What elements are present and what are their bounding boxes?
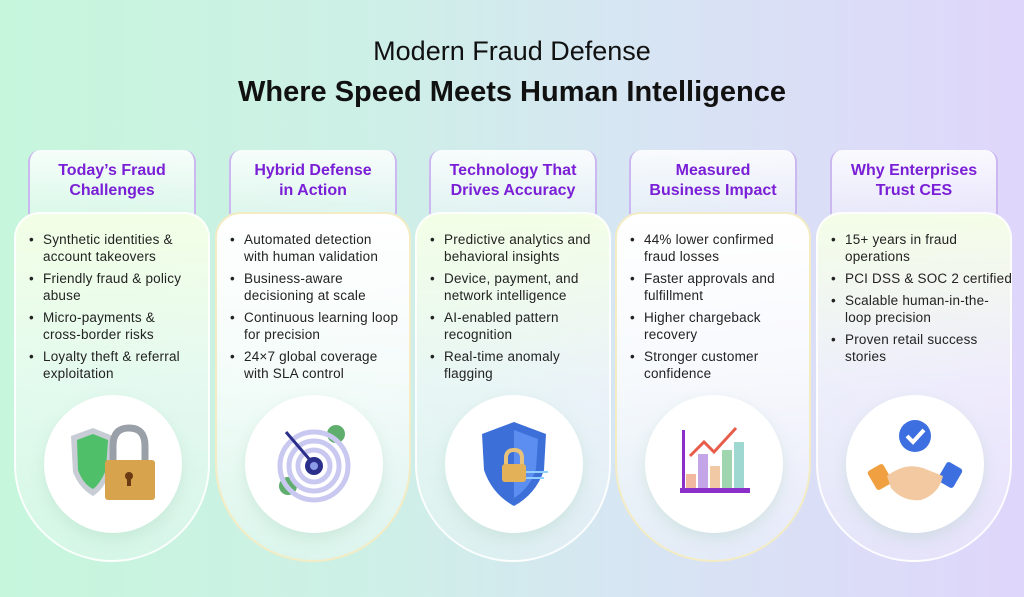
panel: business impact [615,150,811,562]
bullet list: 24×7 global coverage [244,349,377,364]
bullet list [30,232,181,381]
heading: Trust CES [876,182,952,199]
title line 2: Where Speed Meets Human Intelligence [238,76,786,108]
icon: shield padlock [445,395,583,533]
bullet list: Faster approvals and [644,271,775,286]
bullet list: confidence [644,366,711,381]
bullet list: network intelligence [444,288,567,303]
bullet list: Micro-payments & [43,310,155,325]
bullet list: abuse [43,288,81,303]
bullet list: Proven retail success [845,332,978,347]
icon: handshake [846,395,984,533]
panel: fraud challenges [14,150,210,562]
card body [14,212,210,562]
bullet list: Friendly fraud & policy [43,271,181,286]
bullet list: 44% lower confirmed [644,232,774,247]
bullet list: PCI DSS & SOC 2 certified [845,271,1012,286]
card body [615,212,811,562]
bullet list: with human validation [244,249,378,264]
bullet list: account takeovers [43,249,156,264]
bullet list: Synthetic identities & [43,232,173,247]
heading [28,150,196,214]
heading: Hybrid Defense [254,162,372,179]
bullet list: with SLA control [244,366,344,381]
heading [830,150,998,214]
heading: Technology That [450,162,576,179]
bullet list [630,232,775,381]
heading: in Action [279,182,347,199]
bullet list: recognition [444,327,512,342]
icon: shield and lock [44,395,182,533]
bullet list: 15+ years in fraud [845,232,957,247]
bullet list: exploitation [43,366,114,381]
bullet list: for precision [244,327,320,342]
bullet list: Loyalty theft & referral [43,349,180,364]
icon: maze target [245,395,383,533]
bullet list: Device, payment, and [444,271,579,286]
bullet list [832,232,1012,364]
heading: Why Enterprises [851,162,977,179]
bullet list: decisioning at scale [244,288,366,303]
bullet list [430,232,591,381]
bullet list: Real-time anomaly [444,349,560,364]
bullet list: fraud losses [644,249,719,264]
bullet list: fulfillment [644,288,703,303]
bullet list: loop precision [845,310,931,325]
heading: Measured [676,162,750,179]
heading: Business Impact [649,182,777,199]
heading: Challenges [69,182,155,199]
icon: bar chart [645,395,783,533]
bullet list: Higher chargeback [644,310,761,325]
heading: Drives Accuracy [451,182,575,199]
heading [429,150,597,214]
bullet list: recovery [644,327,697,342]
bullet list: operations [845,249,910,264]
heading: Today’s Fraud [58,162,166,179]
bullet list: Continuous learning loop [244,310,398,325]
bullet list: Stronger customer [644,349,758,364]
bullet list: flagging [444,366,493,381]
card body [816,212,1012,562]
panel: why trust CES [816,150,1012,562]
bullet list: stories [845,349,886,364]
bullet list: Automated detection [244,232,372,247]
bullet list [230,232,398,381]
title line 1: Modern Fraud Defense [373,36,651,66]
card body [215,212,411,562]
heading [629,150,797,214]
card body [415,212,611,562]
panel: hybrid defense [215,150,411,562]
bullet list: Business-aware [244,271,343,286]
bullet list: behavioral insights [444,249,560,264]
bullet list: Scalable human-in-the- [845,293,989,308]
bullet list: cross-border risks [43,327,154,342]
bullet list: AI-enabled pattern [444,310,559,325]
heading [229,150,397,214]
panel: technology [415,150,611,562]
bullet list: Predictive analytics and [444,232,591,247]
